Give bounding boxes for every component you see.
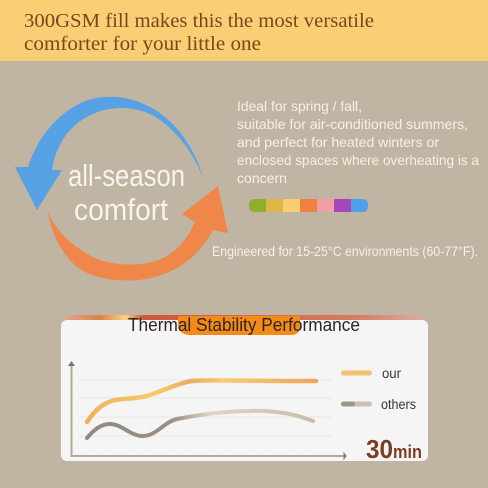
legend (341, 366, 416, 412)
legend: others: others (381, 397, 416, 412)
time label: 30min (366, 434, 422, 464)
panel: thermal stability chart (61, 315, 428, 464)
header banner (0, 0, 488, 61)
icon: orange arrow (48, 186, 228, 280)
icon: blue arrow (15, 97, 203, 210)
time label: 30min: min (393, 442, 422, 462)
chart axes (68, 361, 346, 459)
label: all-season comfort (68, 158, 185, 227)
text block: usage description: enclosed spaces where overheating is a (237, 152, 479, 168)
grid lines (78, 380, 332, 436)
cycle diagram: all-season comfort (15, 97, 228, 280)
heading: comforter for your little one (24, 33, 261, 55)
text block: usage description (237, 98, 479, 186)
text block: usage description: concern (237, 170, 287, 186)
heading: 300GSM fill makes this the most versatile (24, 10, 374, 32)
title tab (178, 316, 300, 335)
heading (24, 10, 374, 55)
legend: our: our (382, 366, 401, 381)
text block: usage description: Ideal for spring / fall, (237, 98, 362, 114)
text block: usage description: and perfect for heated winters or (237, 134, 439, 150)
label: all-season comfort: comfort (74, 192, 168, 227)
panel top strip (64, 315, 425, 323)
line: others (87, 411, 313, 438)
time label: 30min: 30 (366, 434, 393, 464)
chart title: Thermal Stability Performance (128, 315, 360, 335)
colour swatch bar (249, 199, 368, 212)
line: our (87, 380, 316, 422)
panel background (61, 320, 428, 461)
label: all-season comfort: all-season (68, 158, 185, 193)
text block: usage description: suitable for air-conditioned summers, (237, 116, 468, 132)
